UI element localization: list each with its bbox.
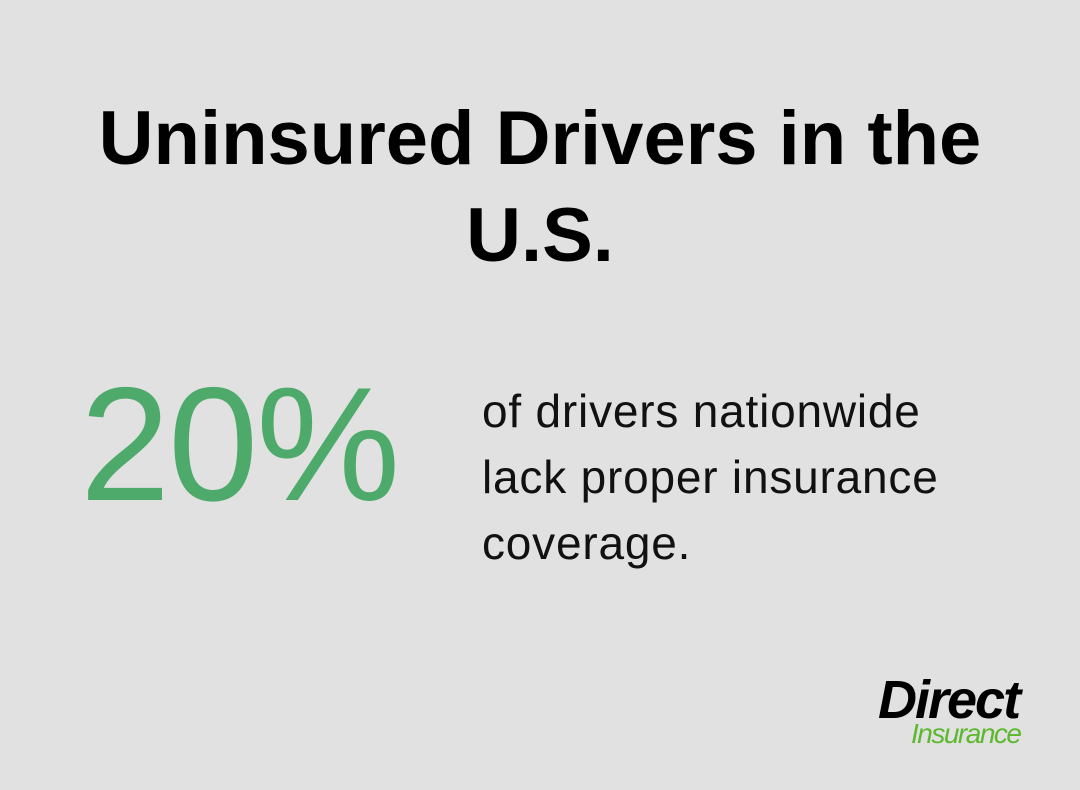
title bbox=[99, 96, 981, 278]
stat description: coverage. bbox=[482, 517, 691, 569]
logo: Direct Insurance: Insurance bbox=[911, 718, 1020, 749]
stat description: lack proper insurance bbox=[482, 451, 939, 503]
logo: Direct Insurance: Direct bbox=[878, 670, 1019, 730]
big stat: 20%: 20% bbox=[80, 354, 398, 535]
stat description bbox=[482, 385, 939, 569]
title: Uninsured Drivers in the bbox=[99, 96, 981, 181]
title: U.S. bbox=[466, 193, 614, 278]
stat description: of drivers nationwide bbox=[482, 385, 921, 437]
